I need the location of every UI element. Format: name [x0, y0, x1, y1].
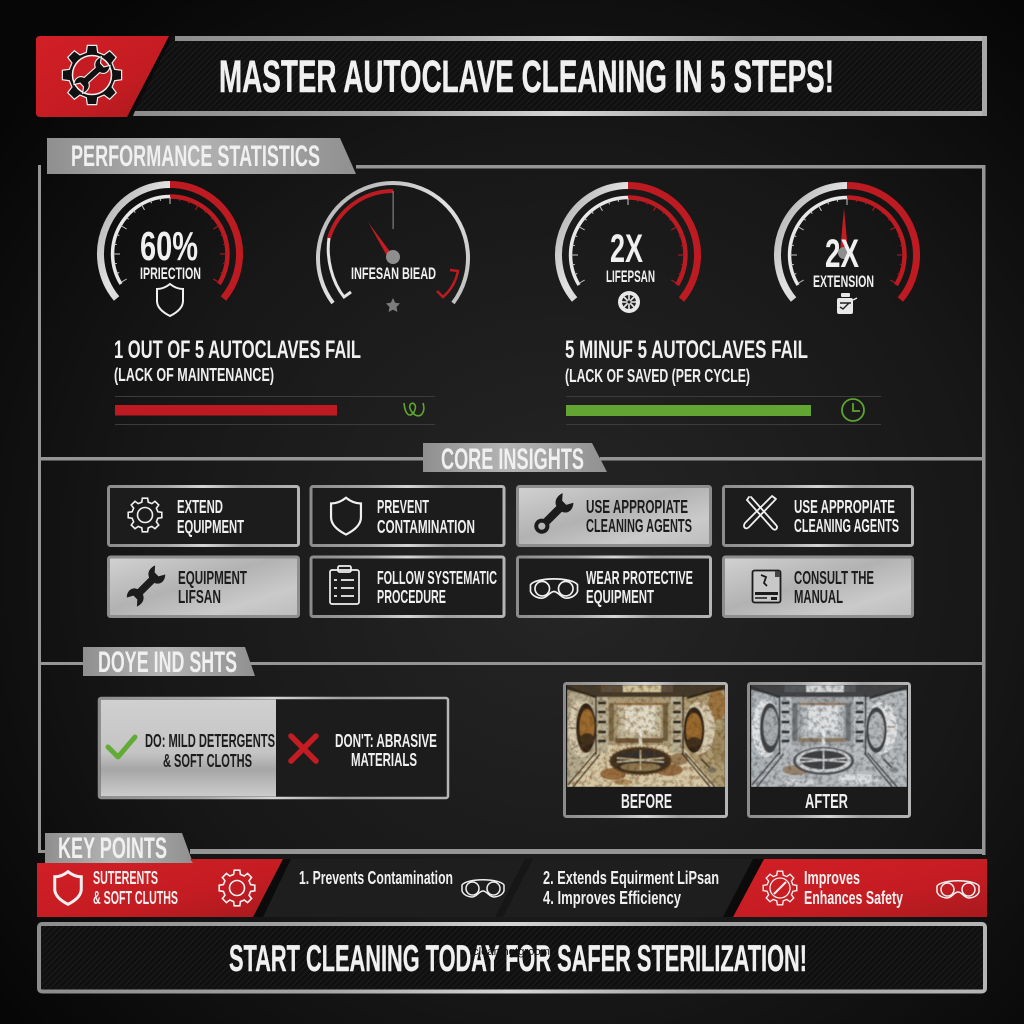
section heading: key points — [45, 832, 193, 865]
card: extend equipment — [108, 486, 298, 546]
inner red arc — [329, 191, 393, 238]
gauge: 2X lifespan — [558, 186, 698, 313]
card label: CONSULT THE — [794, 568, 874, 588]
card: equipment lifespan (silver) — [108, 557, 298, 616]
progress bar fill — [566, 405, 811, 416]
card label — [794, 568, 874, 607]
metal texture — [751, 685, 907, 787]
gauge label: LIFEPSAN — [606, 267, 655, 286]
rust texture — [567, 685, 725, 787]
card label: USE APPROPIATE — [586, 497, 688, 517]
gauge label: IPRIECTION — [140, 264, 201, 283]
gauge value: 60% — [140, 223, 198, 269]
card label — [178, 568, 247, 607]
progress bar frame — [566, 396, 881, 425]
gauge label: EXTENSION — [813, 272, 874, 291]
points 2 and 4 text — [543, 868, 719, 908]
section heading: core insights — [423, 443, 607, 476]
card label: FOLLOW SYSTEMATIC — [377, 568, 497, 588]
icon: goggles — [937, 881, 979, 898]
icon: shield — [331, 498, 361, 535]
card label: EQUIPMENT — [178, 568, 247, 588]
call to action banner — [39, 924, 985, 992]
gauge needle — [368, 222, 391, 256]
icon: clipboard — [330, 566, 359, 604]
do text: & SOFT CLOTHS — [163, 751, 252, 771]
icon: wrench — [530, 492, 576, 538]
main panel outline — [38, 165, 986, 855]
do text: DO: MILD DETERGENTS — [145, 731, 275, 751]
band right red segment — [733, 859, 987, 917]
icon: green loop — [404, 403, 424, 416]
band left red segment — [37, 859, 283, 917]
card: prevent contamination — [311, 486, 504, 546]
card: consult the manual (silver) — [724, 557, 912, 616]
card: use appropriate cleaning agents (silver) — [518, 486, 710, 546]
panel: do and don't — [99, 698, 448, 798]
icon: checklist — [837, 293, 857, 314]
right band text: Enhances Safety — [804, 888, 903, 908]
icon: round gear badge — [618, 291, 640, 313]
progress bar fill — [115, 405, 337, 416]
card label: USE APPROPIATE — [794, 497, 895, 517]
icon: clock — [842, 399, 864, 421]
icon: red cross — [291, 736, 316, 761]
card label: EQUIPMENT — [177, 517, 244, 537]
card label: MANUAL — [794, 587, 843, 607]
photo card: before — [564, 684, 726, 816]
don't text: DON'T: ABRASIVE — [335, 731, 437, 751]
icon: gear with wrench — [763, 871, 797, 905]
card label — [377, 497, 475, 537]
card label: PROCEDURE — [377, 587, 446, 607]
gauge: infesan biead — [318, 183, 468, 312]
card label — [794, 497, 899, 536]
right band text — [804, 868, 903, 908]
card label — [177, 497, 244, 537]
gauge label: INFESAN BIEAD — [351, 264, 436, 283]
card label — [586, 497, 692, 536]
right band text: Improves — [804, 868, 860, 888]
do side background — [100, 700, 276, 796]
before label: BEFORE — [621, 791, 672, 813]
icon: gear — [128, 498, 162, 532]
icon: green check — [108, 737, 135, 757]
band middle dark segment — [263, 859, 753, 917]
photo card: after — [748, 684, 910, 816]
do text — [145, 731, 275, 771]
card label: EQUIPMENT — [586, 587, 654, 607]
section heading: key points: KEY POINTS — [58, 832, 167, 865]
gauge needle — [840, 208, 848, 252]
illustration: dirty chamber — [567, 685, 725, 787]
small overlaid web address: cleaningtgroom — [473, 946, 550, 958]
inner white arc — [328, 238, 351, 297]
card label: CLEANING AGENTS — [586, 516, 692, 536]
card: follow systematic procedure — [311, 557, 504, 616]
section heading: performance statistics — [47, 138, 356, 174]
points 2 and 4 text: 4. Improves Efficiency — [543, 888, 681, 908]
points 2 and 4 text: 2. Extends Equirment LiPsan — [543, 868, 719, 888]
icon: gear and wrench logo — [62, 45, 122, 105]
left band text: & SOFT CLUTHS — [93, 888, 178, 908]
stat headline: 5 MINUF 5 AUTOCLAVES FAIL — [565, 336, 808, 364]
stat subtext: (LACK OF MAINTENANCE) — [114, 365, 274, 385]
card label — [586, 568, 693, 607]
card: wear protective equipment — [518, 557, 710, 616]
icon: goggles — [530, 579, 578, 598]
stat block: left failure rate — [114, 336, 435, 425]
section heading: performance statistics: PERFORMANCE STATISTICS — [71, 140, 320, 173]
card label: EXTEND — [177, 497, 223, 517]
tick marker — [392, 191, 394, 229]
icon: shield — [157, 284, 183, 316]
key points band — [37, 859, 987, 917]
section heading: core insights: CORE INSIGHTS — [441, 443, 584, 476]
card label — [377, 568, 497, 607]
gauge dial — [558, 186, 698, 300]
progress bar frame — [115, 396, 435, 425]
card label: LIFSAN — [178, 587, 221, 607]
stat headline: 1 OUT OF 5 AUTOCLAVES FAIL — [114, 336, 361, 364]
gauge dial — [100, 184, 240, 298]
inner red end mark — [437, 270, 458, 297]
gauge: 60% protection — [100, 184, 240, 316]
icon: shield — [55, 872, 81, 904]
header title plate — [133, 36, 987, 116]
after label: AFTER — [805, 791, 848, 813]
card: use appropriate cleaning agents (dark) — [724, 486, 912, 546]
point 1 text: 1. Prevents Contamination — [299, 868, 453, 888]
left band text — [93, 868, 178, 908]
card label: PREVENT — [377, 497, 429, 517]
stat block: right time saved — [565, 336, 881, 425]
needle hub — [386, 250, 400, 264]
don't text: MATERIALS — [351, 750, 417, 770]
icon: wrench — [124, 564, 168, 608]
icon: crossed tools — [744, 496, 777, 530]
gauge dial — [777, 186, 917, 300]
icon: manual — [752, 570, 780, 602]
header banner — [36, 36, 987, 117]
stat subtext: (LACK OF SAVED (PER CYCLE) — [565, 366, 750, 386]
section heading: do and don't: DOYE IND SHTS — [98, 646, 237, 679]
card label: WEAR PROTECTIVE — [586, 568, 693, 588]
card label: CLEANING AGENTS — [794, 516, 899, 536]
illustration: clean chamber — [751, 685, 907, 787]
don't text — [335, 731, 437, 770]
needle hub — [838, 247, 850, 259]
icon: gear — [219, 870, 255, 906]
icon: star — [386, 298, 400, 312]
gauge: 2X extension — [777, 186, 917, 314]
header red tab — [36, 36, 169, 117]
icon: goggles — [462, 880, 504, 897]
gauge value: 2X — [825, 232, 859, 276]
band black underlay — [250, 859, 770, 917]
section heading: do and don't — [83, 646, 255, 679]
card label: CONTAMINATION — [377, 517, 475, 537]
gauge value: 2X — [610, 227, 643, 271]
outer ring — [318, 183, 468, 303]
left band text: SUTERENTS — [93, 868, 158, 888]
